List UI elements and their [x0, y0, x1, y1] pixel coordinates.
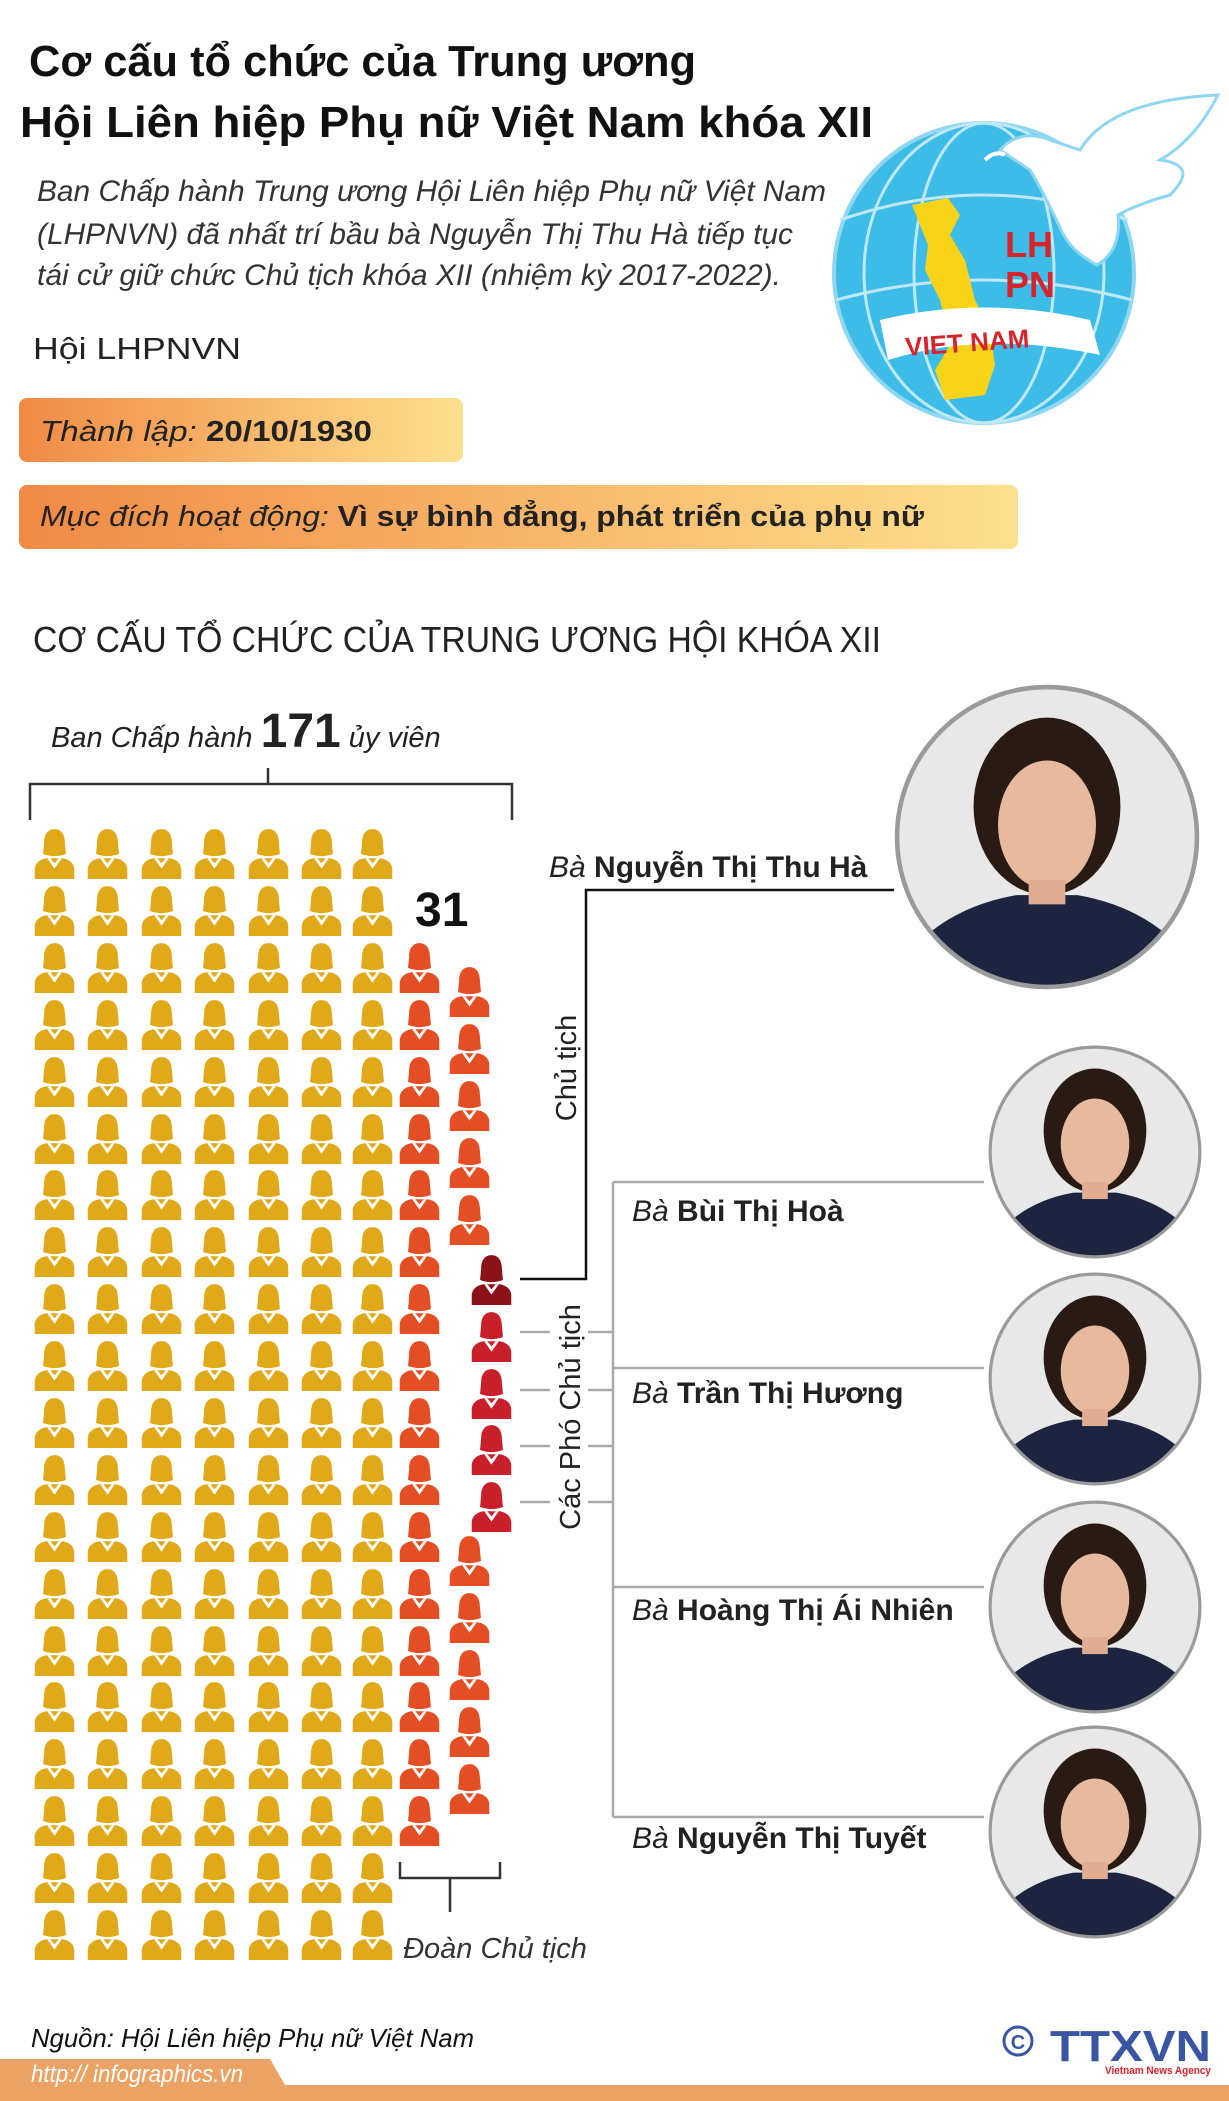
photo: chairwoman — [894, 684, 1200, 990]
title: Hội Liên hiệp Phụ nữ Việt Nam khóa XII — [20, 98, 873, 147]
icons: vice chairwomen — [472, 1312, 511, 1532]
source: Nguồn: Hội Liên hiệp Phụ nữ Việt Nam — [31, 2023, 474, 2053]
intro text — [37, 175, 826, 292]
label: 31: 31 — [415, 884, 468, 937]
connectors: vice chairwomen — [520, 1182, 984, 1817]
names: vice chairwomen: Bà Nguyễn Thị Tuyết — [632, 1821, 926, 1855]
names: vice chairwomen: Bà Bùi Thị Hoà — [632, 1195, 844, 1228]
bracket label: 171 members — [30, 705, 512, 820]
bracket label: 171 members: Ban Chấp hành 171 ủy viên — [51, 705, 441, 758]
logo: LH — [1005, 224, 1053, 265]
intro text: Ban Chấp hành Trung ương Hội Liên hiệp Phụ nữ Việt Nam — [37, 175, 826, 208]
logo: VIET NAM — [904, 323, 1030, 362]
box: purpose: Mục đích hoạt động: Vì sự bình đẳng, phát triển của phụ nữ — [40, 499, 924, 533]
box: purpose — [19, 485, 1018, 549]
connector: chairwoman — [520, 890, 894, 1279]
logo: PN — [1005, 264, 1055, 305]
photos: vice chairwomen — [988, 1045, 1202, 1939]
label: Chủ tịch: Chủ tịch — [551, 1015, 583, 1121]
bracket: Đoàn Chủ tịch: Đoàn Chủ tịch — [403, 1933, 587, 1965]
logo: TTXVN: C — [1011, 2032, 1025, 2054]
footer bar: http:// infographics.vn — [31, 2061, 243, 2088]
intro text: tái cử giữ chức Chủ tịch khóa XII (nhiệm kỳ 2017-2022). — [37, 259, 781, 292]
icon: chairwoman — [472, 1255, 511, 1305]
intro text: (LHPNVN) đã nhất trí bầu bà Nguyễn Thị Thu Hà tiếp tục — [37, 218, 793, 251]
box: founding date: Thành lập: 20/10/1930 — [40, 416, 372, 448]
names: vice chairwomen: Bà Hoàng Thị Ái Nhiên — [632, 1593, 954, 1627]
logo: TTXVN: TTXVN — [1050, 2022, 1211, 2071]
name: chairwoman: Bà Nguyễn Thị Thu Hà — [549, 850, 868, 884]
logo: TTXVN: Vietnam News Agency — [1105, 2065, 1212, 2077]
names: vice chairwomen — [632, 1195, 954, 1855]
icon grid: presidium (orange) — [400, 943, 489, 1846]
section heading: CƠ CẤU TỔ CHỨC CỦA TRUNG ƯƠNG HỘI KHÓA XII — [33, 617, 881, 660]
label: Hội LHPNVN: Hội LHPNVN — [33, 331, 241, 366]
box: founding date — [19, 398, 463, 462]
names: vice chairwomen: Bà Trần Thị Hương — [632, 1377, 903, 1410]
icon grid: yellow members — [35, 829, 392, 1960]
title — [20, 37, 873, 147]
title: Cơ cấu tổ chức của Trung ương — [29, 37, 696, 86]
logo — [834, 95, 1218, 423]
bracket: Đoàn Chủ tịch — [400, 1862, 587, 1965]
logo: TTXVN — [1004, 2022, 1212, 2077]
footer bar — [0, 2059, 1229, 2101]
label: Các Phó Chủ tịch: Các Phó Chủ tịch — [555, 1304, 587, 1530]
